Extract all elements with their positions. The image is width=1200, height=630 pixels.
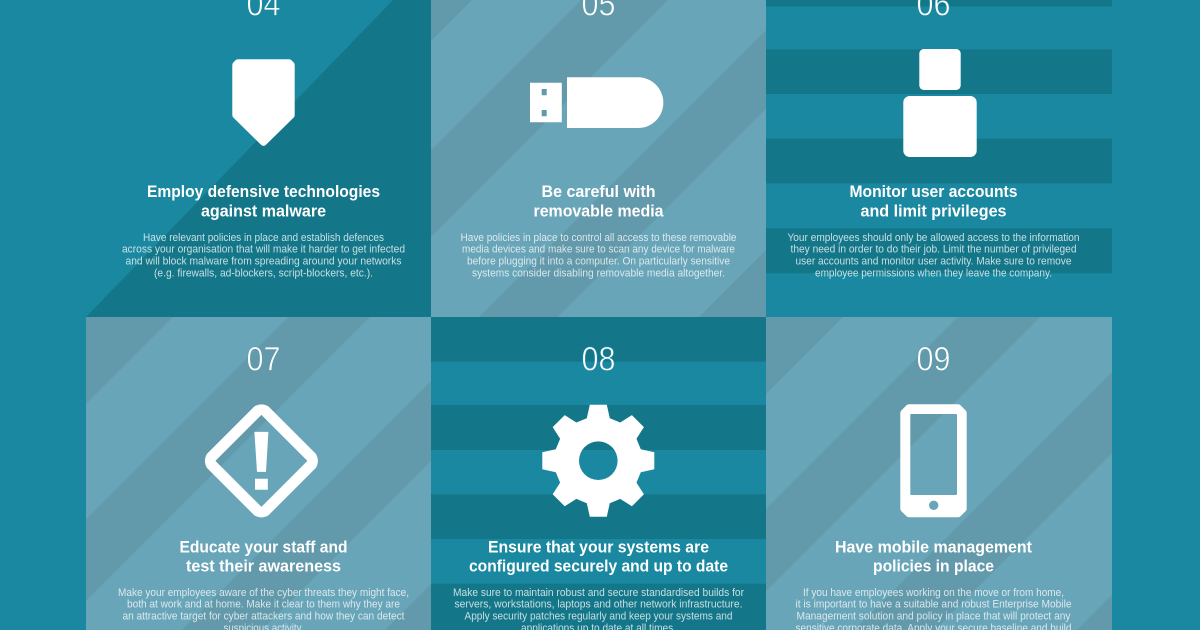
heading: Monitor user accounts [850, 183, 1018, 201]
heading: Be careful with [542, 183, 656, 201]
body text: servers, workstations, laptops and other network infrastructure. [454, 599, 742, 611]
body text [122, 232, 405, 279]
icon: shield [232, 59, 295, 146]
icon: warning diamond [205, 404, 318, 517]
number 07: 07 [246, 340, 280, 378]
body text [788, 232, 1080, 279]
panel: 09 mobile management [0, 317, 1200, 630]
heading: test their awareness [186, 558, 341, 576]
panel: 06 monitor user accounts [766, 0, 1112, 317]
heading [835, 538, 1032, 576]
body text: across your organisation that will make it harder to get infected [122, 244, 405, 256]
icon: user [903, 49, 977, 157]
panel: 07 educate your staff [0, 317, 1200, 630]
icon: usb stick [530, 77, 663, 128]
heading: Employ defensive technologies [147, 183, 380, 201]
heading: and limit privileges [860, 202, 1006, 220]
body text: Have relevant policies in place and establish defences [143, 232, 384, 244]
body text: employee permissions when they leave the company. [815, 267, 1052, 279]
body text [460, 232, 736, 279]
heading [180, 538, 348, 576]
body text: both at work and at home. Make it clear to them why they are [127, 599, 400, 611]
heading: Educate your staff and [180, 538, 348, 556]
heading [850, 183, 1018, 220]
body text: and will block malware from spreading around your networks [126, 256, 402, 268]
body text: Apply security patches regularly and keep your systems and [464, 611, 732, 623]
heading: Have mobile management [835, 538, 1032, 556]
body text [453, 587, 744, 630]
body text: an attractive target for cyber attackers and how they can detect [122, 611, 404, 623]
icon: gear [542, 405, 654, 517]
heading [534, 183, 664, 220]
icon: smartphone [900, 404, 967, 517]
body text: it is important to have a suitable and robust Enterprise Mobile [796, 599, 1072, 611]
heading [147, 183, 380, 220]
body text: Your employees should only be allowed access to the information [788, 232, 1080, 244]
heading: removable media [534, 202, 664, 220]
body text: Have policies in place to control all access to these removable [460, 232, 736, 244]
body text: Make your employees aware of the cyber threats they might face, [118, 587, 409, 599]
body text: before plugging it into a computer. On particularly sensitive [467, 256, 730, 268]
heading: configured securely and up to date [469, 558, 728, 576]
body text: systems consider disabling removable media altogether. [472, 267, 725, 279]
body text [796, 587, 1072, 630]
body text: media devices and make sure to scan any device for malware [462, 244, 735, 256]
heading: against malware [201, 202, 326, 220]
body text [118, 587, 409, 630]
body text: (e.g. firewalls, ad-blockers, script-blockers, etc.). [154, 267, 373, 279]
body text: they need in order to do their job. Limit the number of privileged [790, 244, 1076, 256]
panel: 08 configured securely [431, 317, 766, 630]
panel: 04 employ defensive technologies [86, 0, 431, 317]
heading: policies in place [873, 558, 994, 576]
body text: Make sure to maintain robust and secure standardised builds for [453, 587, 744, 599]
number 08: 08 [582, 340, 616, 378]
number 09: 09 [916, 340, 950, 378]
body text: If you have employees working on the move or from home, [803, 587, 1064, 599]
body text: user accounts and monitor user activity. Make sure to remove [796, 256, 1072, 268]
body text: Management solution and policy in place that will protect any [796, 611, 1071, 623]
heading: Ensure that your systems are [488, 538, 709, 556]
heading [469, 538, 728, 576]
